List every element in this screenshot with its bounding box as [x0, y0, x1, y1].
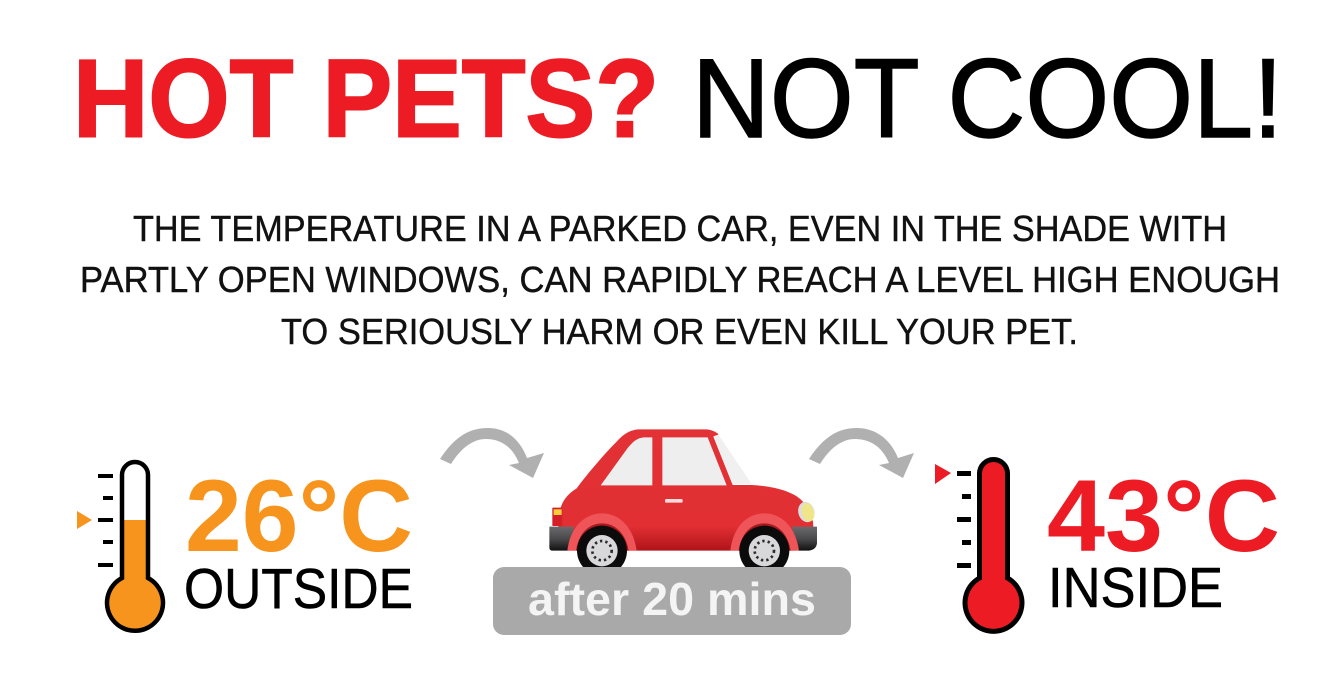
label: inside: INSIDE: [1048, 556, 1223, 620]
front window: [662, 437, 727, 485]
intro text block: [80, 208, 1280, 352]
icon: red car: [549, 429, 817, 576]
icon: orange thermometer: [77, 462, 170, 640]
front bumper: [792, 527, 817, 551]
rear wheel: [567, 513, 637, 576]
panel: outside temperature: [77, 459, 413, 640]
car body: [558, 429, 813, 551]
title: HOT PETS?: [73, 38, 659, 160]
arrow: to inside temperature: [809, 428, 914, 478]
intro text block: THE TEMPERATURE IN A PARKED CAR, EVEN IN THE SHADE WITH: [133, 208, 1227, 249]
arrow: to car: [440, 428, 544, 478]
panel: inside temperature: [935, 459, 1280, 631]
door handle: [665, 499, 683, 503]
headlight: [796, 500, 817, 524]
rear window: [601, 437, 652, 485]
title: NOT COOL!: [692, 36, 1283, 161]
windshield: [714, 435, 752, 484]
rear bumper: [549, 527, 574, 551]
intro text block: PARTLY OPEN WINDOWS, CAN RAPIDLY REACH A LEVEL HIGH ENOUGH: [80, 259, 1280, 300]
front wheel: [730, 513, 799, 576]
intro text block: TO SERIOUSLY HARM OR EVEN KILL YOUR PET.: [281, 311, 1078, 352]
temperature value: 43°C: 43°C: [1047, 459, 1280, 573]
title: [73, 36, 1283, 161]
time badge: [493, 567, 851, 635]
temperature value: 26°C: 26°C: [185, 459, 413, 573]
icon: red thermometer: [935, 460, 1022, 631]
label: outside: OUTSIDE: [184, 557, 413, 621]
time badge: after 20 mins: [528, 573, 816, 625]
tail light: [552, 508, 562, 526]
